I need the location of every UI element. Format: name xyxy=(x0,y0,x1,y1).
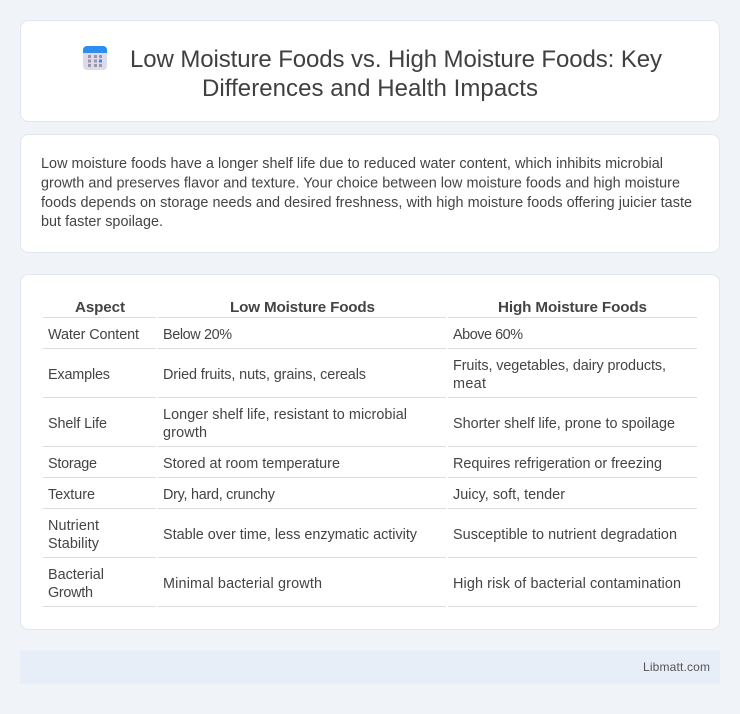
row: storage xyxy=(43,456,697,478)
row: examples: Dried fruits, nuts, grains, cereals xyxy=(163,367,366,383)
footer credit: Libmatt.com xyxy=(643,660,710,674)
row: water content xyxy=(43,327,697,349)
panel: introduction xyxy=(20,134,720,252)
title: Differences and Health Impacts xyxy=(202,75,538,102)
row: water content: Above 60% xyxy=(453,327,523,343)
table header row: High Moisture Foods xyxy=(498,299,647,316)
row: water content: Below 20% xyxy=(163,327,232,343)
row: storage: Requires refrigeration or freezing xyxy=(453,456,662,472)
row: texture: Dry, hard, crunchy xyxy=(163,487,276,503)
row: texture xyxy=(43,487,697,509)
row: examples: Fruits, vegetables, dairy products, xyxy=(453,358,666,374)
text block: introduction: foods depends on storage needs and desired freshness, with high moisture foods offering juicier taste xyxy=(41,195,692,211)
table header row xyxy=(43,299,697,318)
row: shelf life: Shelf Life xyxy=(48,416,107,432)
row: nutrient stability: Stable over time, less enzymatic activity xyxy=(163,527,418,543)
table header row: Low Moisture Foods xyxy=(230,299,375,316)
row: bacterial growth: Growth xyxy=(48,585,93,601)
row: bacterial growth: High risk of bacterial contamination xyxy=(453,576,681,592)
row: water content: Water Content xyxy=(48,327,139,343)
row: storage: Storage xyxy=(48,456,97,472)
text block: introduction: growth and preserves flavor and texture. Your choice between low moisture foods and high moisture xyxy=(41,176,680,192)
row: texture: Texture xyxy=(48,487,95,503)
row: bacterial growth: Minimal bacterial growth xyxy=(163,576,322,592)
row: texture: Juicy, soft, tender xyxy=(453,487,565,503)
row: nutrient stability xyxy=(43,518,697,558)
row: shelf life: Longer shelf life, resistant to microbial xyxy=(163,407,407,423)
title xyxy=(130,46,662,102)
icon: calendar xyxy=(83,46,107,70)
row: nutrient stability: Stability xyxy=(48,536,100,552)
row: nutrient stability: Nutrient xyxy=(48,518,99,534)
row: shelf life xyxy=(43,407,697,447)
row: examples: Examples xyxy=(48,367,110,383)
panel: comparison table xyxy=(20,274,720,630)
table header row: Aspect xyxy=(75,299,125,316)
row: nutrient stability: Susceptible to nutrient degradation xyxy=(453,527,677,543)
row: shelf life: growth xyxy=(163,425,207,441)
text block: introduction xyxy=(41,156,692,230)
panel: title header xyxy=(20,20,720,122)
row: shelf life: Shorter shelf life, prone to spoilage xyxy=(453,416,675,432)
row: bacterial growth xyxy=(43,567,697,607)
row: bacterial growth: Bacterial xyxy=(48,567,104,583)
row: examples xyxy=(43,358,697,398)
text block: introduction: Low moisture foods have a longer shelf life due to reduced water content, which inhibits microbial xyxy=(41,156,663,172)
footer xyxy=(20,650,720,684)
title: Low Moisture Foods vs. High Moisture Foods: Key xyxy=(130,46,662,73)
text block: introduction: but faster spoilage. xyxy=(41,214,163,230)
row: examples: meat xyxy=(453,376,486,392)
row: storage: Stored at room temperature xyxy=(163,456,340,472)
